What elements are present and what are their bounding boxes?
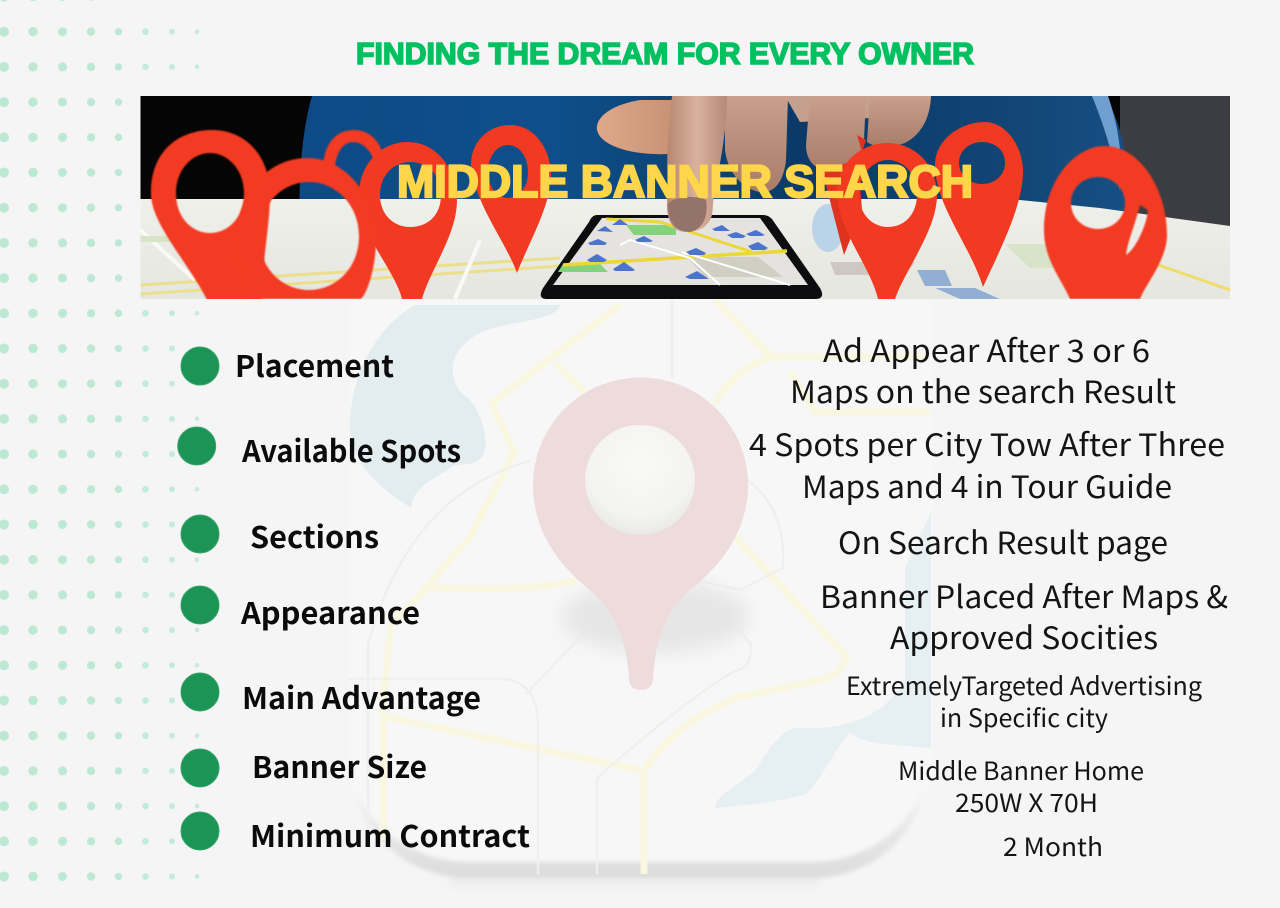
row: placement: Placement	[235, 342, 394, 386]
photo: hand pressing the screen	[597, 96, 931, 232]
title: FINDING THE DREAM FOR EVERY OWNER	[356, 36, 974, 71]
row: sections: On Search Result page	[838, 518, 1168, 563]
banner heading: MIDDLE BANNER SEARCH	[397, 156, 973, 207]
row: available spots: 4 Spots per City Tow After Three	[749, 420, 1225, 465]
row: sections: Sections	[250, 513, 379, 557]
photo: red map pins	[151, 122, 1167, 300]
photo: map table	[140, 199, 1230, 299]
dot pattern	[0, 0, 210, 890]
row: available spots: Available Spots	[241, 427, 461, 471]
row: banner size: Middle Banner Home	[898, 752, 1144, 788]
row: banner size: 250W X 70H	[955, 784, 1098, 820]
background location pin	[533, 377, 749, 690]
row: appearance	[181, 572, 1228, 658]
row: banner size	[181, 743, 1144, 820]
photo: smartphone	[541, 215, 822, 299]
row: minimum contract	[181, 812, 1103, 864]
row: sections	[181, 513, 1168, 563]
row: minimum contract: 2 Month	[1003, 828, 1103, 864]
row: placement: Maps on the search Result	[790, 367, 1176, 412]
row: main advantage	[181, 667, 1202, 735]
row: appearance: Approved Socities	[890, 613, 1158, 658]
row: main advantage: in Specific city	[940, 699, 1108, 735]
row: available spots	[178, 420, 1225, 507]
row: placement: Ad Appear After 3 or 6	[823, 326, 1150, 371]
row: placement	[181, 326, 1176, 412]
hero banner photo	[140, 96, 1230, 300]
background map watermark	[348, 300, 932, 884]
row: available spots: Maps and 4 in Tour Guide	[802, 462, 1172, 507]
row: main advantage: Main Advantage	[242, 674, 481, 718]
photo backdrop: dark wall and shirt	[140, 96, 1230, 226]
row: minimum contract: Minimum Contract	[250, 812, 530, 856]
row: appearance: Appearance	[240, 589, 420, 633]
row: appearance: Banner Placed After Maps &	[820, 572, 1228, 617]
row: banner size: Banner Size	[252, 743, 427, 787]
row: main advantage: ExtremelyTargeted Advertising	[846, 667, 1202, 703]
